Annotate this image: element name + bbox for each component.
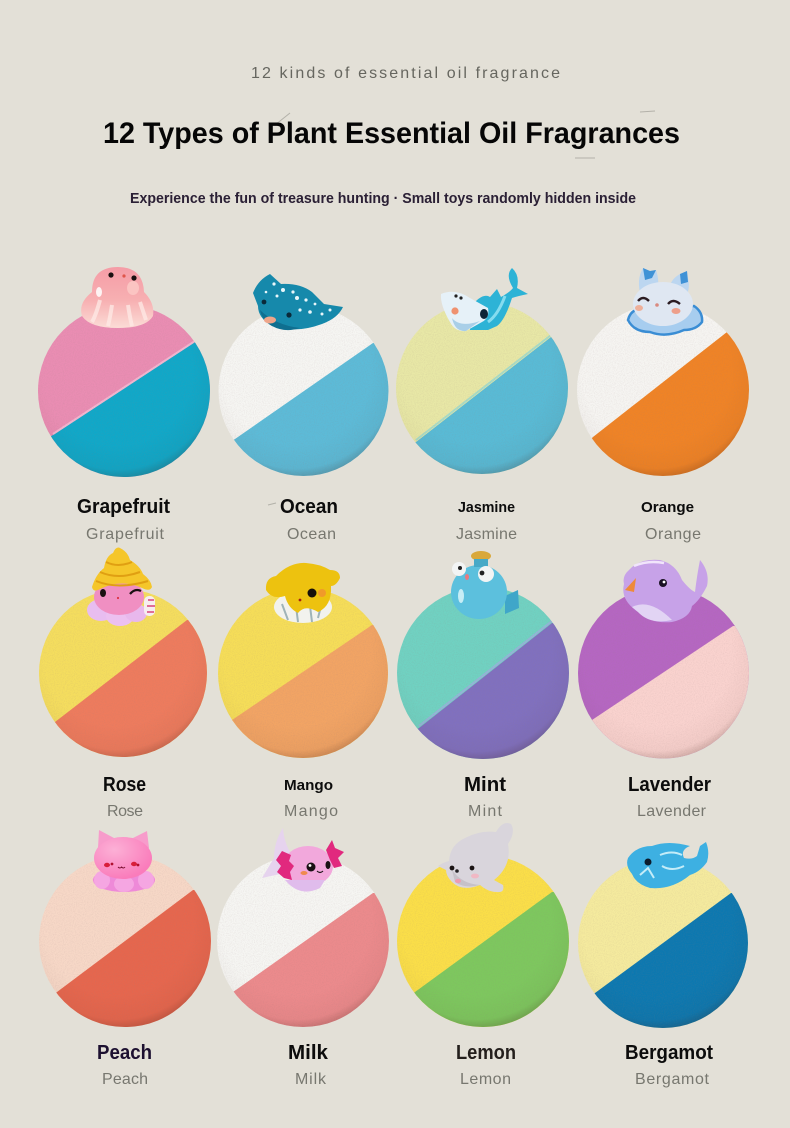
name: Rose [103, 774, 146, 796]
card: Orange [570, 268, 760, 543]
sublabel: Bergamot [635, 1071, 710, 1088]
icon: shark toy [441, 268, 528, 331]
sublabel: Rose [107, 803, 143, 820]
sublabel: Peach [102, 1071, 148, 1088]
bath bomb: pale yellow and deep blue [578, 866, 748, 1028]
name: Lavender [628, 774, 711, 796]
icon: purple dolphin toy [623, 560, 708, 622]
card: Milk [217, 828, 389, 1084]
bath bomb: yellow and coral [39, 592, 207, 757]
icon: pink cat jellyfish toy [93, 830, 155, 892]
sublabel: Mango [284, 803, 338, 820]
name: Lemon [456, 1042, 516, 1064]
header [103, 65, 680, 207]
bath bomb: peach and red-orange [39, 860, 211, 1027]
icon: hermit crab octopus toy [87, 548, 155, 626]
bath bomb: yellow and green [397, 858, 569, 1027]
title: 12 Types of Plant Essential Oil Fragrances [103, 117, 680, 150]
sublabel: Milk [295, 1071, 327, 1088]
bath bomb: purple and pale pink [578, 596, 749, 758]
icon: yellow sea creature toy [266, 563, 340, 623]
name: Bergamot [625, 1042, 713, 1064]
sublabel: Lemon [460, 1071, 511, 1088]
sublabel: Grapefruit [86, 526, 165, 543]
name: Grapefruit [77, 496, 170, 518]
sublabel: Jasmine [456, 526, 517, 543]
card: Mango [218, 562, 388, 820]
card: Bergamot [578, 842, 748, 1088]
name: Jasmine [458, 499, 515, 516]
icon: axolotl toy [262, 828, 344, 892]
sublabel: Lavender [637, 803, 707, 820]
card: Ocean [218, 274, 388, 539]
card: Jasmine [396, 268, 568, 539]
name: Peach [97, 1042, 152, 1064]
bath bomb: white and orange [577, 309, 749, 476]
name: Ocean [280, 496, 338, 518]
name: Mango [284, 777, 333, 794]
bath bomb: mint and purple [397, 590, 569, 759]
subtitle: Experience the fun of treasure hunting · Small toys randomly hidden inside [130, 190, 636, 207]
card: Mint [397, 551, 569, 816]
icon: pink octopus toy [81, 267, 153, 328]
icon: seal toy [438, 823, 513, 892]
card: Rose [39, 548, 207, 816]
card: Grapefruit [38, 267, 210, 542]
name: Mint [464, 774, 506, 796]
icon: blue glass fish toy [627, 842, 708, 888]
card: Lemon [397, 823, 569, 1084]
bath bomb: white and light blue [218, 314, 388, 476]
sublabel: Orange [645, 526, 701, 543]
icon: blue bunny slug toy [628, 268, 702, 335]
sublabel: Ocean [287, 526, 336, 543]
card: Lavender [578, 560, 749, 816]
card: Peach [39, 830, 211, 1084]
bath bomb: yellow and orange [218, 592, 388, 758]
name: Milk [288, 1042, 329, 1064]
bath bomb: pink and blue [38, 310, 210, 477]
sublabel: Mint [468, 803, 503, 820]
bath bomb: white and pink [217, 861, 389, 1027]
eyebrow text: 12 kinds of essential oil fragrance [251, 65, 560, 82]
icon: blue googly-eyed whale toy [451, 551, 519, 619]
icon: whale shark toy [253, 274, 343, 330]
bath bomb: pale yellow and blue [396, 306, 568, 474]
name: Orange [641, 499, 694, 516]
